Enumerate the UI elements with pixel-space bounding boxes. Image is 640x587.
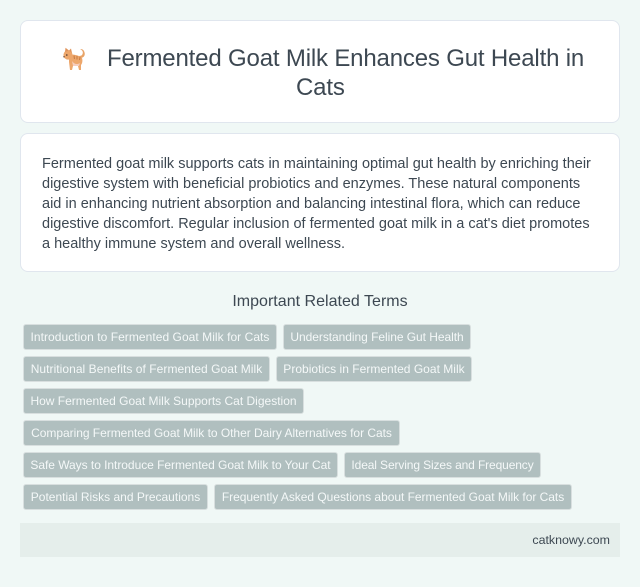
text block: summary (42, 156, 591, 252)
title: Fermented Goat Milk Enhances Gut Health in (107, 45, 584, 72)
tag: Nutritional Benefits of Fermented Goat Milk (31, 362, 262, 376)
tag (23, 484, 208, 510)
text block: summary: digestive system with beneficial probiotics and enzymes. These natural components (42, 176, 580, 192)
tag (23, 324, 277, 350)
panel: title card (20, 20, 620, 123)
text block: summary: digestive discomfort. Regular inclusion of fermented goat milk in a cat's diet promotes (42, 216, 590, 232)
text block: summary: aid in enhancing nutrient absorption and balancing intestinal flora, which can reduce (42, 196, 580, 212)
tag: Comparing Fermented Goat Milk to Other Dairy Alternatives for Cats (31, 426, 392, 440)
tag list (23, 324, 572, 510)
tag: Frequently Asked Questions about Fermented Goat Milk for Cats (222, 490, 564, 504)
heading: related terms: Important Related Terms (232, 293, 408, 310)
tag: Ideal Serving Sizes and Frequency (351, 458, 534, 472)
footer text: catknowy.com (532, 533, 610, 547)
text block: summary: a healthy immune system and overall wellness. (42, 236, 345, 252)
tag: Probiotics in Fermented Goat Milk (283, 362, 465, 376)
tag (23, 356, 270, 382)
tag: Understanding Feline Gut Health (290, 330, 464, 344)
tag: Potential Risks and Precautions (31, 490, 200, 504)
tag (344, 452, 541, 478)
title: Cats (296, 74, 345, 101)
tag (276, 356, 472, 382)
panel: summary card (20, 133, 620, 272)
title (107, 45, 584, 101)
tag (23, 388, 304, 414)
tag (283, 324, 471, 350)
tag: How Fermented Goat Milk Supports Cat Digestion (30, 394, 297, 408)
icon: cat (63, 48, 85, 70)
tag: Safe Ways to Introduce Fermented Goat Milk to Your Cat (30, 458, 331, 472)
tag (23, 452, 338, 478)
tag (23, 420, 400, 446)
tag: Introduction to Fermented Goat Milk for Cats (31, 330, 269, 344)
tag (214, 484, 572, 510)
text block: summary: Fermented goat milk supports cats in maintaining optimal gut health by enriching their (42, 156, 591, 172)
footer bar (20, 523, 620, 557)
